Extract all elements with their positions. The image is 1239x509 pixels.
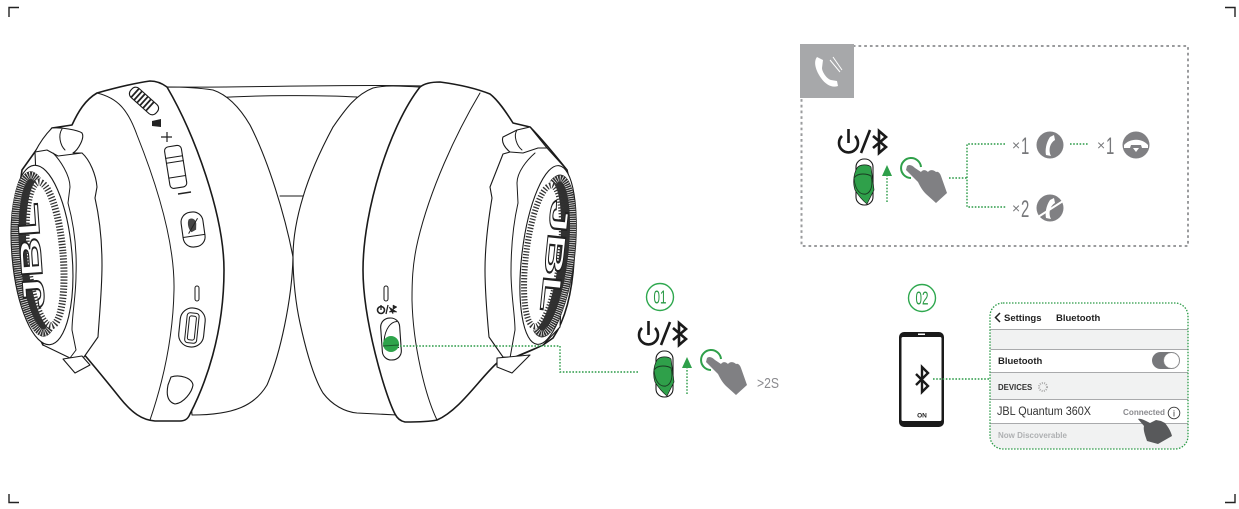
panel: phone call controls	[800, 44, 1188, 246]
step 1 slider instruction	[639, 321, 747, 397]
info icon: i	[1173, 408, 1175, 418]
left ear cup	[4, 81, 293, 421]
phone with bluetooth on: ON	[917, 412, 927, 420]
press ring	[901, 158, 921, 178]
aux oval	[167, 376, 193, 404]
step 2 badge: 02	[916, 288, 928, 308]
right earcup rings	[485, 127, 567, 373]
hold duration: >2S	[757, 375, 779, 392]
upward arrow	[682, 357, 692, 394]
press once label: 1	[1021, 134, 1029, 160]
upward arrow	[882, 165, 892, 202]
left speaker mesh with logo	[4, 163, 80, 347]
press once label: 1	[1106, 134, 1114, 160]
plus and slider	[161, 132, 172, 142]
discoverable note: Now Discoverable	[998, 431, 1067, 440]
left side controls	[127, 85, 206, 404]
press twice label: ×	[1012, 200, 1020, 216]
connector from phone to settings	[933, 378, 990, 380]
Bluetooth toggle row: Bluetooth	[998, 356, 1043, 367]
devices heading: DEVICES	[998, 383, 1032, 392]
icon: reject call	[1036, 194, 1064, 222]
press once label: ×	[1097, 137, 1105, 153]
step 1 badge: 01	[654, 288, 666, 308]
LED indicator	[195, 286, 199, 301]
slider with green thumb	[854, 159, 874, 205]
left earcup rings	[35, 128, 102, 373]
connector from slider to step 1	[400, 346, 638, 372]
right speaker mesh with logo: JBL	[534, 199, 576, 313]
power and bluetooth symbols	[839, 129, 886, 153]
device name: JBL Quantum 360X	[997, 406, 1091, 418]
headband	[167, 85, 423, 196]
branch connectors	[949, 144, 1089, 207]
scroll dial	[127, 85, 161, 117]
phone with bluetooth on	[899, 332, 944, 427]
icon: end call	[1122, 132, 1150, 158]
power and bluetooth symbols	[639, 321, 686, 345]
panel: Bluetooth settings screen: Bluetooth	[1056, 313, 1101, 324]
call icon tile	[800, 44, 854, 98]
right ear cup	[293, 82, 585, 422]
press twice label: 2	[1021, 197, 1029, 223]
icon: answer call	[1036, 132, 1064, 158]
right side power control	[378, 286, 402, 361]
hand tapping connected	[1138, 419, 1172, 444]
settings header	[996, 313, 1000, 322]
hand	[706, 357, 747, 395]
slider with green thumb	[654, 351, 674, 397]
info icon	[1168, 407, 1180, 419]
press twice label	[1012, 197, 1029, 223]
right speaker mesh with logo	[511, 163, 585, 347]
press once label	[1097, 134, 1114, 160]
hand	[906, 165, 947, 203]
step 2 badge	[908, 284, 936, 312]
green highlight dot	[383, 336, 399, 352]
panel: Bluetooth settings screen	[990, 303, 1188, 449]
left speaker mesh with logo: JBL	[11, 202, 52, 310]
spinner	[1039, 383, 1047, 391]
press ring	[701, 350, 721, 370]
panel: Bluetooth settings screen: Settings	[1004, 313, 1041, 324]
press once label: ×	[1012, 137, 1020, 153]
USB port	[177, 307, 206, 348]
mic button	[180, 211, 206, 248]
speaker symbol	[152, 119, 161, 127]
step 1 badge	[646, 284, 674, 310]
connected status: Connected	[1123, 408, 1165, 417]
press once label	[1012, 134, 1029, 160]
